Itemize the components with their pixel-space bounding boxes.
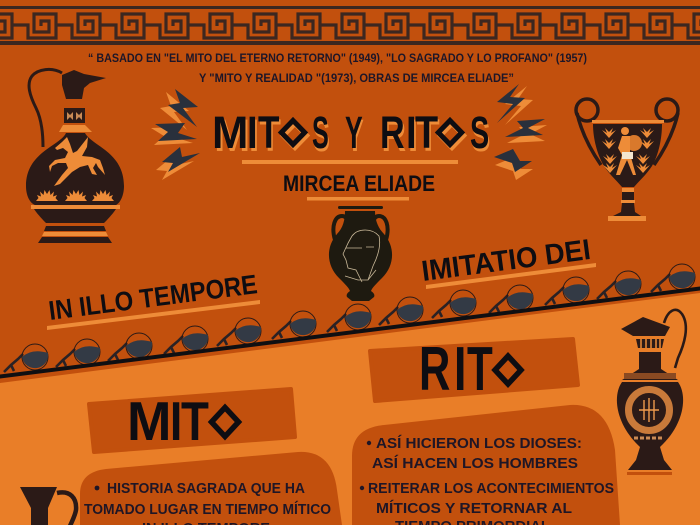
heading: mito: I [170,390,182,452]
icon: lightning bolts left [151,89,200,180]
mito text: HISTORIA SAGRADA QUE HA [107,481,306,497]
title: R [380,107,405,158]
medallion symbol [639,398,659,422]
title: T [258,107,279,158]
heading: mito: M [127,390,171,452]
rito text: ASÍ HACEN LOS HOMBRES [372,455,578,472]
title: S [312,107,329,158]
icon: warrior kylix [576,99,678,221]
heading plate: mito [89,389,295,452]
sisyphus frieze [0,264,700,378]
title: T [415,107,438,158]
title: Y [345,107,363,158]
mito text [84,481,331,525]
icon: pegasus [49,137,105,186]
subtitle quote [88,53,587,85]
heading: rito: I [454,335,466,404]
title: S [470,107,489,158]
lower light panel [0,293,700,525]
rito text: MÍTICOS Y RETORNAR AL [376,500,572,517]
portrait lines [343,230,380,282]
phrase: imitatio dei: IMITATIO DEI [420,234,592,288]
title: I [406,107,416,158]
icon: warrior [616,127,642,175]
text box: mito [80,452,342,525]
heading plate: rito [370,339,578,401]
phrase: in illo tempore: IN ILLO TEMPORE [47,269,259,326]
rito text: ASÍ HICIERON LOS DIOSES: [376,435,582,452]
rito text [360,435,614,525]
title: M [212,107,248,158]
title diamonds [281,120,462,144]
icon: pegasus jug [26,69,124,243]
rito text: REITERAR LOS ACONTECIMIENTOS [368,481,614,497]
heading: mito: T [181,390,209,452]
title: I [247,107,258,158]
heading: rito: T [467,335,493,404]
author name: MIRCEA ELIADE [283,171,435,196]
mito text: TOMADO LUGAR EN TIEMPO MÍTICO [84,501,331,518]
greek key border [0,6,700,45]
text box: rito [352,405,620,525]
icon: bottom left jug [20,487,76,525]
subtitle quote: “ BASADO EN "EL MITO DEL ETERNO RETORNO" (1949), "LO SAGRADO Y LO PROFANO" (1957) [88,53,587,65]
subtitle quote: Y "MITO Y REALIDAD "(1973), OBRAS DE MIRCEA ELIADE” [199,73,514,85]
heading: rito: R [419,335,450,404]
icon: central vase with portrait [329,206,392,301]
author underline [307,197,409,200]
title underline [242,160,458,164]
icon: lightning bolts right [494,84,547,180]
icon: patterned jug right [617,310,686,475]
